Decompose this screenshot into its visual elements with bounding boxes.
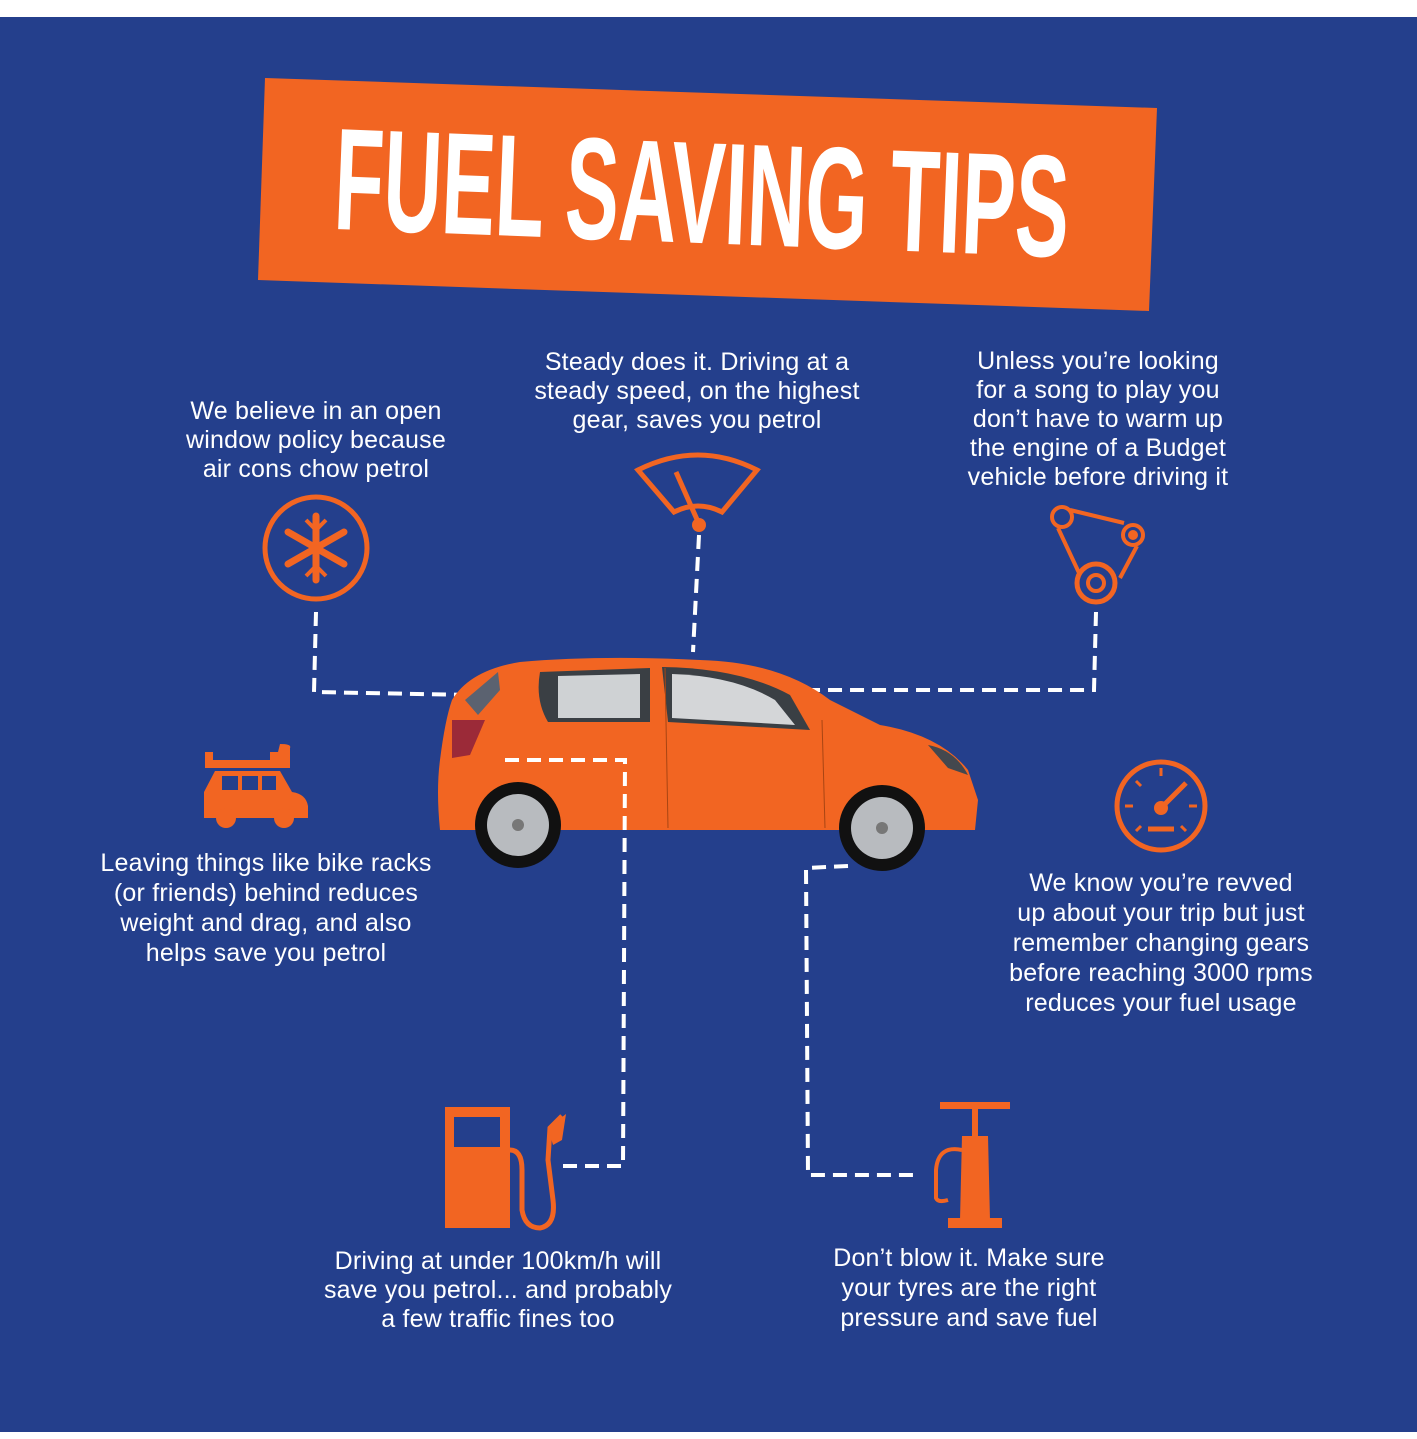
text: bike racks: (or friends) behind reduces	[114, 879, 418, 907]
text: speed limit	[324, 1247, 672, 1333]
text: gear changes: before reaching 3000 rpms	[1009, 959, 1313, 987]
icon: speedometer	[1117, 762, 1205, 850]
icon: snowflake	[265, 497, 367, 599]
text: steady speed: Steady does it. Driving at a	[545, 348, 849, 376]
text: window policy: window policy because	[186, 426, 446, 454]
text: window policy	[186, 397, 446, 483]
text: steady speed	[534, 348, 860, 434]
text: steady speed: steady speed, on the highest	[534, 377, 860, 405]
text: window policy: We believe in an open	[190, 397, 442, 425]
text: tyre pressure: pressure and save fuel	[840, 1304, 1098, 1332]
text: tyre pressure	[833, 1244, 1105, 1332]
dashed connectors	[314, 535, 1096, 695]
text: tyre pressure: Don’t blow it. Make sure	[833, 1244, 1105, 1272]
icon: tyre pump	[936, 1102, 1010, 1228]
text: gear changes	[1009, 869, 1313, 1017]
text: gear changes: reduces your fuel usage	[1025, 989, 1297, 1017]
text: gear changes: We know you’re revved	[1029, 869, 1293, 897]
text: speed limit: save you petrol... and probably	[324, 1276, 672, 1304]
text: speed limit: a few traffic fines too	[381, 1305, 615, 1333]
icon: fuel pump	[445, 1107, 566, 1228]
text: bike racks: Leaving things like bike racks	[100, 849, 432, 877]
text: warm up engine: don’t have to warm up	[973, 405, 1223, 433]
title banner	[258, 78, 1157, 311]
text: speed limit: Driving at under 100km/h will	[335, 1247, 661, 1275]
car illustration	[438, 658, 978, 871]
text: steady speed: gear, saves you petrol	[572, 406, 822, 434]
text: warm up engine	[968, 347, 1228, 491]
lower dashed connectors	[505, 760, 920, 1175]
text: gear changes: remember changing gears	[1013, 929, 1309, 957]
text: warm up engine: vehicle before driving it	[968, 463, 1228, 491]
text: tyre pressure: your tyres are the right	[842, 1274, 1096, 1302]
text: warm up engine: for a song to play you	[976, 376, 1220, 404]
icon: engine belt	[1052, 507, 1143, 602]
text: gear changes: up about your trip but just	[1017, 899, 1305, 927]
title banner: FUEL SAVING TIPS	[332, 98, 1072, 289]
icon: car with roof rack	[204, 744, 308, 828]
text: warm up engine: the engine of a Budget	[970, 434, 1226, 462]
text: window policy: air cons chow petrol	[203, 455, 429, 483]
icon: windscreen wiper	[638, 455, 757, 532]
text: bike racks: weight and drag, and also	[120, 909, 412, 937]
text: bike racks: helps save you petrol	[146, 939, 386, 967]
text: warm up engine: Unless you’re looking	[977, 347, 1219, 375]
text: bike racks	[100, 849, 432, 967]
